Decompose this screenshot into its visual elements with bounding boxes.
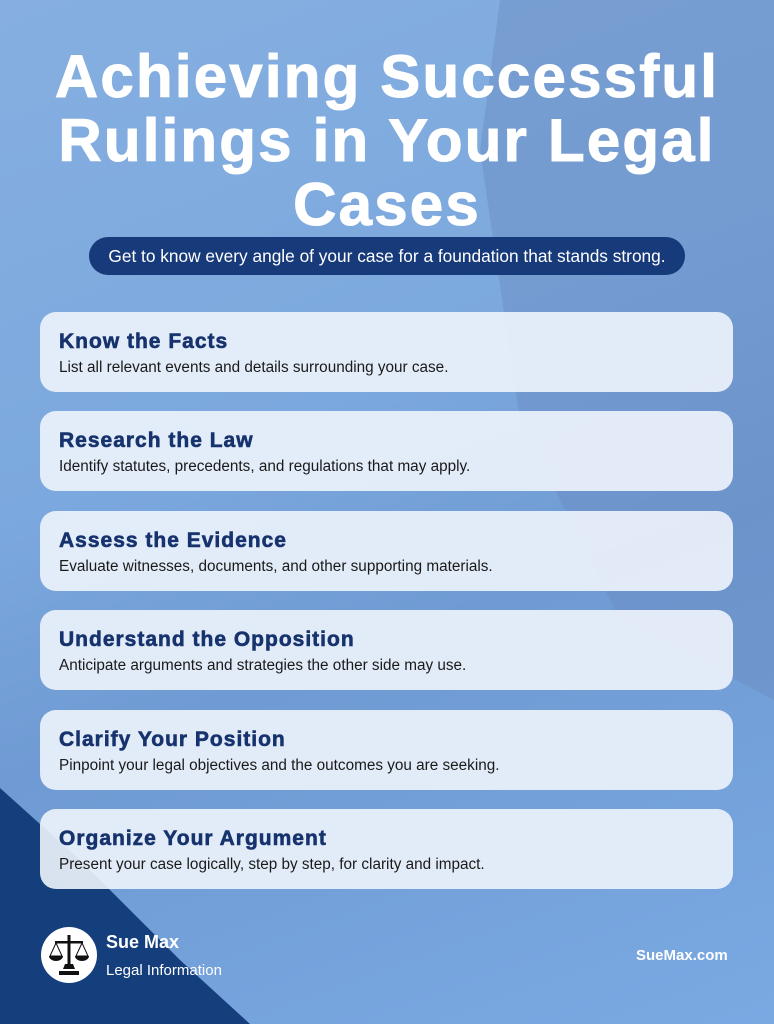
subtitle pill xyxy=(89,237,685,275)
card: understand the opposition xyxy=(40,610,733,690)
brand text: Sue Max xyxy=(106,932,179,952)
card: know the facts: List all relevant events and details surrounding your case. xyxy=(59,359,448,376)
website: SueMax.com xyxy=(636,947,728,964)
card: assess the evidence: Assess the Evidence xyxy=(59,529,287,552)
card: organize your argument: Organize Your Argument xyxy=(59,827,327,850)
footer logo xyxy=(41,927,179,983)
subtitle pill: Get to know every angle of your case for a foundation that stands strong. xyxy=(108,246,666,266)
card: organize your argument: Present your case logically, step by step, for clarity and impact. xyxy=(59,856,485,873)
icon: scales xyxy=(41,927,97,983)
card: understand the opposition: Understand the Opposition xyxy=(59,628,355,651)
card: clarify your position: Pinpoint your legal objectives and the outcomes you are seeking. xyxy=(59,757,499,774)
card: understand the opposition: Anticipate arguments and strategies the other side may use. xyxy=(59,657,466,674)
card: assess the evidence xyxy=(40,511,733,591)
card: organize your argument xyxy=(40,809,733,889)
card: research the law: Identify statutes, precedents, and regulations that may apply. xyxy=(59,458,470,475)
card: research the law xyxy=(40,411,733,491)
title: Cases xyxy=(293,171,481,238)
tagline: Legal Information xyxy=(106,962,222,979)
card: research the law: Research the Law xyxy=(59,429,254,452)
card: assess the evidence: Evaluate witnesses, documents, and other supporting materials. xyxy=(59,558,493,575)
title xyxy=(55,43,719,238)
card: know the facts: Know the Facts xyxy=(59,330,228,353)
card: know the facts xyxy=(40,312,733,392)
title: Achieving Successful xyxy=(55,43,719,110)
title: Rulings in Your Legal xyxy=(58,107,716,174)
card: clarify your position: Clarify Your Position xyxy=(59,728,286,751)
card: clarify your position xyxy=(40,710,733,790)
